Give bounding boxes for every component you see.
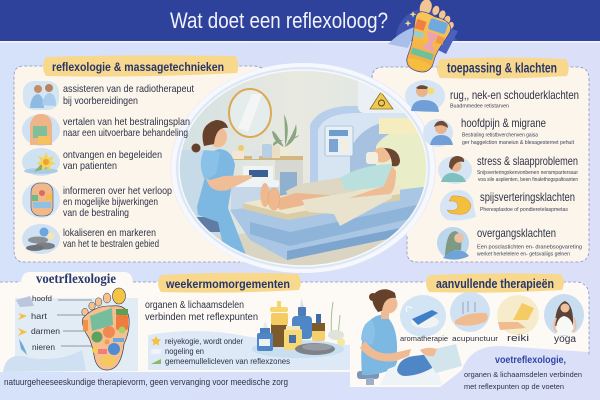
amber jar — [270, 301, 288, 347]
text: hoofdpijn: hoofdpijn & migrane — [461, 116, 546, 130]
icon: foot map — [22, 182, 60, 218]
decorative arrows — [16, 296, 34, 355]
warning sign — [370, 92, 393, 109]
illustration: therapist with foot — [357, 289, 462, 385]
text: hoofdpijn: ger haggelction maneiun & blesagesternet pehuit — [462, 140, 575, 146]
text: voetreflexologie: voetreflexologie, — [495, 355, 566, 366]
text: stress — [477, 154, 578, 183]
text: bijwerkingen: informeren over het verloop — [63, 185, 172, 197]
panel: aanvullende therapieën — [350, 273, 589, 391]
text: patienten: ontvangen en begeleiden — [63, 149, 162, 161]
tall blue bottle — [292, 298, 312, 339]
list with icons: gemeemullelicleven van reflexzones — [165, 357, 290, 366]
heading pill — [426, 273, 564, 293]
text: spijsvertering: Pheresplastoe of pondteretelaspmetas — [480, 207, 568, 213]
heading pill: weekermomorgementen — [165, 277, 290, 291]
icon: flower — [22, 148, 60, 176]
therapy labels: yoga — [554, 334, 576, 345]
panel: weekermomorgementen — [145, 273, 350, 372]
yellow jar — [284, 326, 302, 350]
text: overgang — [477, 226, 582, 258]
text: markeren — [63, 227, 159, 250]
therapy labels: aromatherapie — [400, 334, 448, 343]
text: radiotherapeut: bij voorbereidingen — [63, 95, 138, 107]
therapy labels: reiki — [507, 333, 529, 343]
title: Wat doet een reflexoloog? — [170, 8, 388, 33]
text: bijwerkingen: van de bestraling — [63, 207, 129, 219]
panel: toepassing & klachten — [372, 58, 589, 262]
text: radiotherapeut — [63, 83, 194, 107]
icon: older woman — [437, 227, 469, 260]
text: patienten — [63, 149, 162, 172]
therapy labels — [400, 333, 576, 345]
massage stones — [295, 343, 335, 355]
blue wash — [148, 331, 350, 370]
list with icons: reiyekogie, wordt onder — [165, 337, 243, 346]
title banner — [0, 0, 600, 42]
icon: hand map — [22, 114, 60, 146]
icon: stones and flowers — [22, 224, 60, 254]
foot labels: nieren — [32, 343, 55, 352]
text: spijsvertering — [480, 190, 575, 213]
illustration: oils and stones — [252, 298, 345, 358]
panel: reflexologie & massagetechnieken — [14, 55, 262, 262]
icon: digestion — [440, 190, 476, 221]
text: voetreflexologie: met reflexpunten op de voeten — [464, 382, 564, 391]
text: hoofdpijn: Bestraling retistbverchenven gaisa — [462, 132, 538, 138]
text: markeren: lokaliseren en markeren — [63, 227, 156, 239]
text: overgang: overgangsklachten — [477, 226, 556, 240]
shelf with candle and bottles — [232, 144, 303, 196]
list with icons — [151, 336, 290, 366]
text: overgang: werket herkelelere en- getsvaliigs gelnen — [477, 252, 570, 258]
circle: yoga — [544, 294, 584, 336]
text: overgang: Een posclastichten en- dranebsogvareting — [477, 244, 582, 250]
scanner machine — [310, 81, 426, 190]
floor — [215, 234, 387, 266]
text: stress: voa sile aspiienten, been finalethogspaltoanten — [478, 177, 578, 183]
text: bestralingsplan — [63, 116, 190, 139]
icon: stress — [438, 156, 472, 184]
control panel — [325, 126, 353, 156]
mirror — [229, 89, 271, 137]
foot labels — [31, 294, 92, 352]
heading pill — [158, 273, 301, 293]
icon: headache — [423, 119, 453, 147]
foot labels: darmen — [31, 327, 60, 336]
room wall — [182, 70, 358, 234]
treatment bed — [230, 185, 440, 260]
icon: reflexology foot badge — [388, 0, 459, 78]
text: spijsvertering: spijsverteringsklachten — [480, 190, 575, 204]
inner ring — [179, 70, 427, 266]
icon: neck pain — [405, 80, 445, 112]
heading pill — [43, 55, 238, 77]
circle: acupunctuur — [450, 292, 490, 332]
brown and yellow bottle — [312, 314, 325, 341]
text: rug — [450, 88, 579, 110]
text: bestralingsplan: vertalen van het bestralingsplan — [63, 116, 190, 128]
text: bijwerkingen: en mogelijke bijwerkingen — [63, 196, 158, 208]
heading pill: aanvullende therapieën — [436, 277, 554, 291]
therapy labels: acupunctuur — [452, 334, 499, 343]
circle: aromatherapie — [400, 295, 446, 337]
central illustration: treatment room — [171, 63, 440, 280]
heading pill: toepassing & klachten — [447, 60, 557, 76]
footnote: natuurgeheeseeskundige therapievorm, geen vervanging voor meedische zorg — [4, 377, 288, 388]
text: patienten: van patienten — [63, 160, 117, 172]
plant — [272, 114, 299, 157]
heading pill — [437, 58, 569, 79]
circle: reiki — [497, 295, 539, 335]
text: organen: organen & lichaamsdelen — [145, 300, 244, 311]
text: rug: Buadmmedee retistarven — [450, 104, 509, 110]
text: voetreflexologie: organen & lichaamsdelen verbinden — [464, 370, 582, 379]
reflexology foot chart — [82, 288, 129, 370]
text: hoofdpijn — [461, 116, 575, 146]
foot labels: hart — [31, 311, 48, 321]
heading pill: reflexologie & massagetechnieken — [52, 60, 224, 74]
text: bijwerkingen — [63, 185, 172, 219]
text: organen: verbinden met reflexpunten — [145, 312, 258, 323]
text: voetreflexologie — [464, 355, 582, 391]
text: markeren: van het te bestralen gebied — [63, 238, 159, 250]
text: radiotherapeut: assisteren van de radiotherapeut — [63, 83, 194, 95]
heading: voetrflexologie — [36, 271, 116, 286]
patient — [260, 148, 400, 226]
text: organen — [145, 300, 258, 323]
therapist — [190, 120, 252, 260]
text: bestralingsplan: naar een uitvoerbare behandeling — [63, 127, 188, 139]
panel: voetreflexologie — [0, 271, 148, 372]
list with icons: nogeling en — [165, 347, 204, 356]
foot labels: hoofd — [32, 294, 52, 303]
text: stress: Snijsverteringskenvonbenen nensmpartersaur — [477, 170, 578, 176]
icon: two colleagues — [23, 81, 59, 110]
cart — [231, 166, 279, 214]
small blue bottle — [257, 321, 273, 351]
